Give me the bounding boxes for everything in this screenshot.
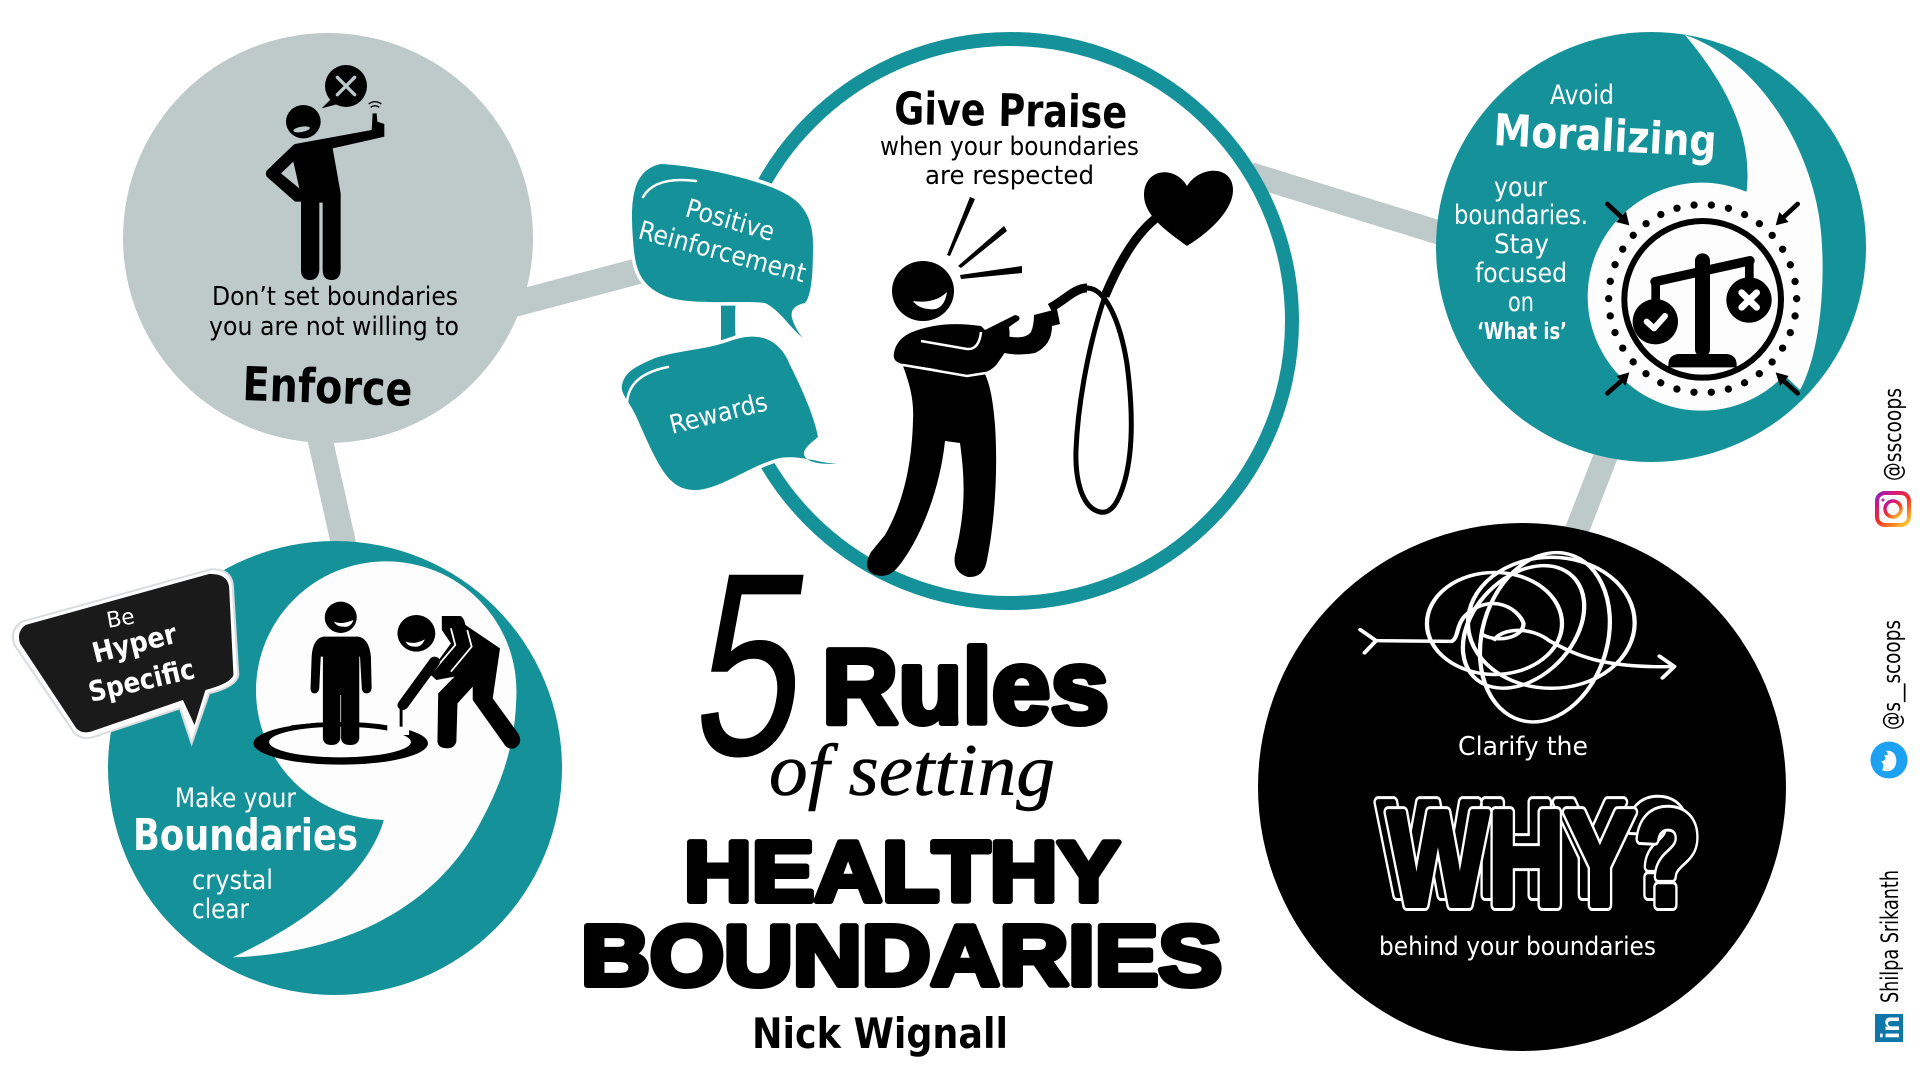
heading: WHY? 3D outlined: WHY? [1378,773,1690,924]
callout: Rewards bubble: Rewards [666,387,771,441]
text: don't set boundaries [209,282,459,342]
text: your boundaries. Stay focused on 'What is': boundaries. [1454,200,1588,231]
text: crystal clear: crystal [192,865,273,896]
panel: make your boundaries crystal clear [108,541,562,995]
callout: Be Hyper Specific bubble [13,569,238,743]
text: your boundaries. Stay focused on 'What is': ‘What is’ [1477,319,1567,345]
callout: Rewards bubble [622,337,837,490]
credit: author name: Shilpa Srikanth [1876,870,1904,1003]
author: Nick Wignall: Nick Wignall [752,1009,1008,1058]
callout: Be Hyper Specific bubble: Be [105,604,137,634]
text: crystal clear [192,865,273,925]
icon: linkedin: in [1875,1016,1905,1039]
text: your boundaries. Stay focused on 'What is': Stay [1494,229,1549,260]
icon: instagram [1877,493,1909,525]
panel: avoid moralizing [1436,32,1866,462]
heading: Give Praise: Give Praise [894,82,1128,139]
callout: Positive Reinforcement bubble: Positive [682,194,778,248]
callout: Be Hyper Specific bubble: Hyper [89,617,180,670]
handle: instagram: @sscoops [1879,388,1907,481]
panel: don't set boundaries you won't enforce [123,33,533,443]
text: your boundaries. Stay focused on 'What is': on [1508,287,1534,318]
icon: twitter [1870,742,1908,778]
icon: tangled scribble arrow [1360,544,1674,730]
text: when your boundaries are respected: when your boundaries [880,132,1139,162]
title: 5 Rules of setting Healthy Boundaries [581,518,1222,1058]
speech mark and icon: people inside a drawn circle [233,561,520,957]
title numeral 5: 5 [680,518,827,811]
connectors between circles [318,174,1610,550]
text: Make your: Make your [175,783,297,814]
text: your boundaries. Stay focused on 'What is': focused [1475,258,1567,289]
text: behind your boundaries: behind your boundaries [1379,932,1656,962]
heading: WHY? 3D outlined: WHY? [1388,783,1700,934]
handle: twitter: @s__scoops [1878,620,1906,730]
heading: Boundaries: Boundaries [133,810,358,861]
title words of setting: of setting [769,730,1055,812]
text: crystal clear: clear [192,894,250,925]
icon: person with raised finger saying no [266,65,384,280]
text: Avoid: Avoid [1550,80,1614,111]
icon: cheering person whipping a heart lasso [867,171,1233,577]
heading: Moralizing: Moralizing [1492,105,1718,168]
credits strip [1870,388,1909,1042]
title word BOUNDARIES: BOUNDARIES [581,909,1222,1004]
callout: Positive Reinforcement bubble: Reinforcement [635,216,809,289]
text: don't set boundaries: Don’t set boundaries [212,282,458,312]
text: don't set boundaries: you are not willing to [209,312,459,342]
text: Clarify the: Clarify the [1458,732,1588,762]
heading: WHY? 3D outlined: WHY? [1378,773,1690,924]
text: when your boundaries are respected [880,132,1139,191]
text: when your boundaries are respected: are respected [925,161,1094,191]
title word Rules: Rules [822,628,1109,746]
text: your boundaries. Stay focused on 'What is' [1454,172,1588,345]
heading: Enforce: Enforce [242,357,413,418]
title word HEALTHY: HEALTHY [684,825,1120,920]
speech mark and icon: balance scale with arrows [1588,35,1823,411]
callout: Be Hyper Specific bubble: Specific [85,652,198,709]
panel: give praise ring [728,39,1292,603]
text: your boundaries. Stay focused on 'What is': your [1494,172,1548,203]
callout: Positive Reinforcement bubble [632,164,813,338]
heading: WHY? 3D outlined: WHY? [1388,783,1700,934]
panel: clarify the why [1258,523,1786,1051]
